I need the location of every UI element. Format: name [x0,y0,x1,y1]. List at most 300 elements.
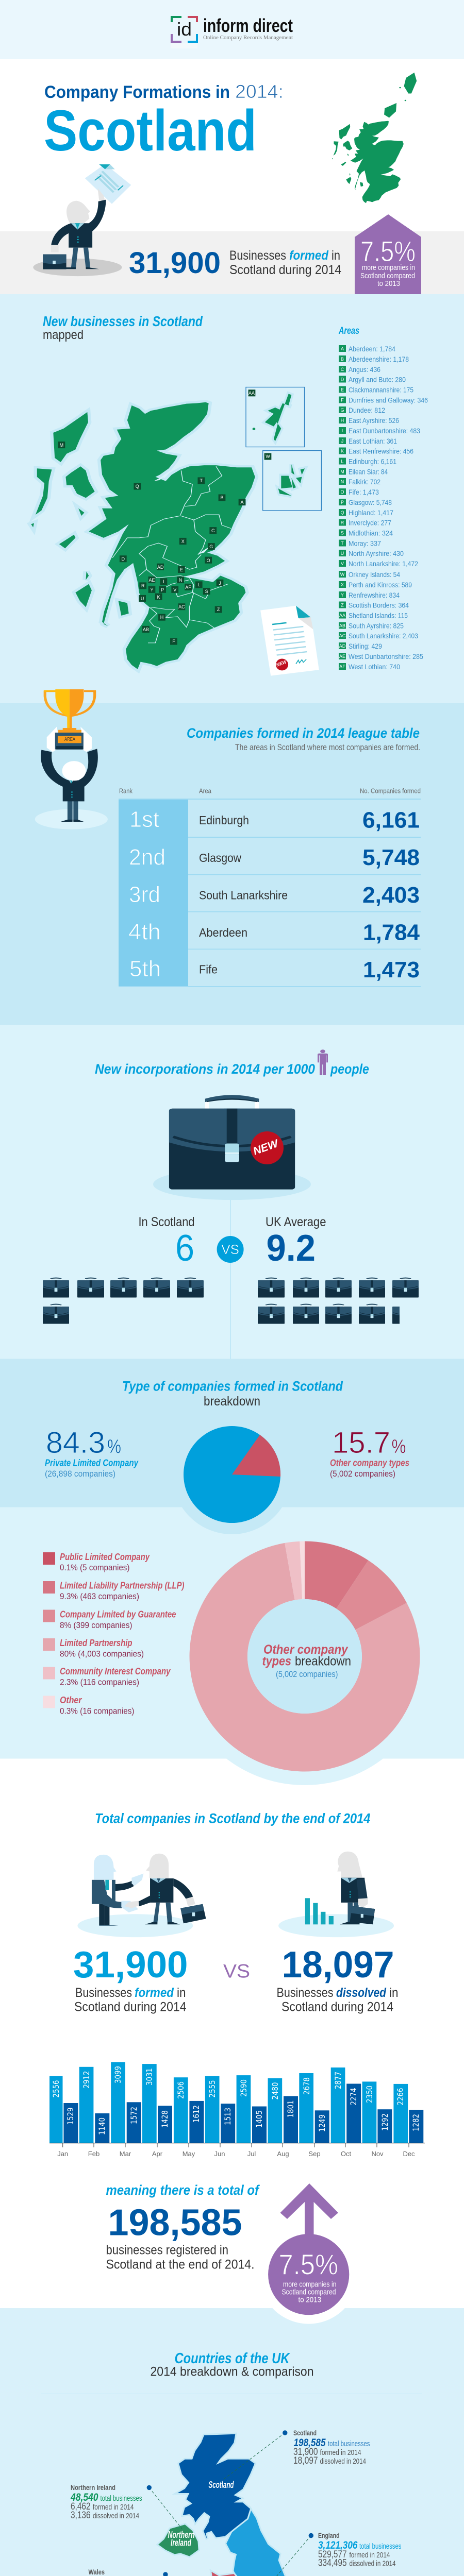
legend: areas: R [341,520,344,526]
map country labels [168,2480,276,2576]
callout: Northern Ireland figures: dissolved in 2014 [93,2512,139,2520]
callout: 7.5% growth arrow: 7.5% [278,2248,338,2280]
donut chart: other company types [176,1528,434,1785]
header band [0,0,464,59]
heading: Countries of the UK [174,2350,290,2367]
map: Scotland by area [31,402,255,669]
comparison: formed vs dissolved [73,1944,398,2014]
callout: Scotland figures: dissolved in 2014 [320,2457,366,2466]
legend: areas: Y [341,592,344,598]
legend: areas: East Lothian: 361 [349,437,397,445]
panel: companies formed league table [0,689,464,1025]
legend: areas: West Lothian: 740 [349,663,400,671]
inset: Shetland Islands: AA [248,391,255,396]
panel: other company types background [0,1507,464,1759]
map labels: C [211,528,215,533]
stat: 31,900 businesses formed: in [332,248,340,263]
callout: 7.5% house [355,214,421,294]
title block [44,81,284,163]
logo: inform direct: Online Company Records Management [203,35,293,41]
table: top areas formed: 2,403 [362,883,420,908]
legend: areas: West Dunbartonshire: 285 [349,652,423,660]
legend: areas: Argyll and Bute: 280 [349,375,406,383]
legend: areas: Shetland Islands: 115 [349,611,408,619]
callout: 7.5% house: 7.5% [360,235,416,267]
heading: Type of companies formed in Scotland [122,1379,343,1394]
map labels: A [240,500,244,505]
stat: 84.3% private limited: (26,898 companies) [45,1469,115,1479]
bar chart: monthly formed vs dissolved: 1529 [65,2107,75,2125]
legend: areas: East Ayrshire: 526 [349,416,399,425]
leader lines [149,2433,311,2576]
bar chart: monthly formed vs dissolved: Feb [88,2150,100,2158]
legend: areas: T [341,541,344,546]
bar chart: monthly formed vs dissolved: 2506 [176,2081,186,2099]
pie chart: company types [184,1426,280,1523]
bar chart: monthly formed vs dissolved: 1140 [97,2117,107,2135]
map labels: J [219,581,221,586]
legend: areas: East Dunbartonshire: 483 [349,427,420,435]
legend: areas: Dumfries and Galloway: 346 [349,396,428,404]
legend: other company types: 80% (4,003 companies) [60,1649,144,1659]
legend: areas: East Renfrewshire: 456 [349,447,413,455]
comparison: formed vs dissolved: in [389,1986,398,2000]
leader dots [147,2430,313,2576]
map country labels: Northern [168,2530,195,2540]
bar chart: monthly formed vs dissolved: 2555 [207,2080,217,2098]
icons: 9.2 briefcases UK average [258,1278,419,1324]
map country labels: Ireland [171,2538,192,2548]
map labels: L [197,582,200,587]
panel: type of companies [0,1359,464,1507]
panel: countries of the UK [0,2308,464,2576]
donut centre label: breakdown [295,1654,351,1668]
stat: 198,585 total: businesses registered in [106,2243,228,2258]
bar chart: monthly formed vs dissolved: 2912 [81,2071,91,2089]
stat: 15.7% other types: % [392,1436,406,1458]
callout: Scotland figures: Scotland [293,2429,317,2437]
donut centre label: (5,002 companies) [276,1669,338,1679]
callout: 7.5% growth arrow: to 2013 [298,2296,321,2304]
legend: areas: A [341,346,344,351]
trophy plaque text: AREA [64,737,75,742]
heading: New businesses in Scotland [43,313,203,329]
table: top areas formed: South Lanarkshire [199,888,288,902]
legend: areas: Areas [338,326,359,336]
table: top areas formed [119,787,421,987]
bar chart: monthly formed vs dissolved: 2480 [270,2082,280,2100]
map labels: D [122,556,125,562]
legend: areas: Clackmannanshire: 175 [349,385,413,394]
legend: areas: Perth and Kinross: 589 [349,581,412,589]
legend: areas: O [340,489,344,495]
illustration: businessman with document [33,164,131,276]
pie chart halo [172,1415,292,1534]
map labels: X [181,539,185,544]
donut centre label: Other company [263,1642,348,1657]
stat: 15.7% other types: Other company types [330,1458,409,1468]
inset: Orkney Islands: W [266,454,270,459]
stat: 31,900 businesses formed: 31,900 [129,246,221,280]
bar chart: monthly formed vs dissolved: 2274 [349,2088,358,2105]
callout: Scotland figures: 31,900 [293,2447,318,2458]
heading [43,313,203,342]
legend: other company types: Limited Partnership [60,1638,132,1648]
illustration: man holding trophy overhead [35,689,108,829]
legend: areas: U [341,551,344,556]
legend: other company types [43,1552,185,1716]
legend: areas: N [341,479,344,484]
legend: areas: P [341,500,344,505]
comparison: formed vs dissolved: Scotland during 2014 [281,2000,393,2014]
legend: areas: S [341,531,344,536]
stat: 31,900 businesses formed [129,246,341,280]
table: top areas formed: 3rd [129,882,160,907]
map region: Northern Ireland [158,2524,198,2556]
table: top areas formed: 4th [128,919,161,945]
map labels: M [60,443,63,448]
stats band [0,231,464,294]
map labels: U [141,596,144,601]
bar chart: monthly formed vs dissolved: 1249 [317,2114,327,2132]
legend: areas: Dundee: 812 [349,406,385,414]
legend: other company types: Company Limited by Guarantee [60,1609,176,1620]
figure: dissolving man and falling bars [305,1852,375,1924]
bar chart: monthly formed vs dissolved: 1513 [223,2108,233,2125]
bar chart: monthly formed vs dissolved: 1282 [411,2114,421,2131]
bar chart: monthly formed vs dissolved: 2678 [302,2077,311,2095]
icon: Scotland map small [332,73,417,203]
bar chart: monthly formed vs dissolved: 3031 [144,2068,154,2086]
legend: other company types: Public Limited Company [60,1552,150,1562]
bar chart: monthly formed vs dissolved: Aug [277,2150,289,2158]
map labels [60,443,244,644]
callout: England figures: total businesses [359,2542,401,2551]
stat: 198,585 total: Scotland at the end of 2014. [106,2258,255,2272]
table: top areas formed: 5,748 [362,845,420,870]
map labels: P [161,587,164,592]
callout: 7.5% house: more companies in [362,263,415,272]
logo: inform direct: id [177,19,192,40]
legend: areas: Angus: 436 [349,365,380,374]
table: top areas formed: Glasgow [199,851,241,865]
legend: areas: AB [339,623,345,629]
legend: areas: Highland: 1,417 [349,509,393,517]
legend: other company types: Limited Liability Partnership (LLP) [60,1581,185,1591]
stat: 15.7% other types [330,1426,409,1479]
stat: 198,585 total: 198,585 [108,2202,242,2243]
legend: other company types: 8% (399 companies) [60,1620,132,1630]
callout: Scotland figures: 18,097 [293,2455,318,2466]
bar chart: monthly formed vs dissolved: Nov [371,2150,384,2158]
map labels: AD [157,565,164,570]
comparison: formed vs dissolved: dissolved [336,1986,387,2000]
title: Scotland: Scotland [44,98,257,163]
legend: areas: Falkirk: 702 [349,478,380,486]
comparison: Scotland 6 vs UK 9.2 [138,1215,326,1269]
legend: other company types: Other [60,1695,82,1705]
callout: England figures: 3,121,306 [318,2539,358,2551]
map labels: T [200,478,203,483]
legend: areas: South Lanarkshire: 2,403 [349,632,418,640]
comparison: Scotland 6 vs UK 9.2: VS [221,1242,239,1257]
bar chart: monthly formed vs dissolved: Jul [247,2150,256,2158]
callout: England figures: dissolved in 2014 [350,2560,396,2568]
map labels: Y [150,587,154,592]
stat: 84.3% private limited: % [107,1436,121,1458]
legend: areas: Aberdeenshire: 1,178 [349,355,409,363]
legend: areas: G [340,408,344,413]
donut centre label: types [262,1654,291,1668]
bar chart: monthly formed vs dissolved: 2590 [239,2079,248,2097]
legend: areas: North Lanarkshire: 1,472 [349,560,418,568]
legend: areas: J [341,438,343,444]
heading [41,2350,422,2394]
map labels: Q [136,484,139,489]
icons: 6 briefcases in Scotland [43,1278,204,1324]
title line: Company Formations in [44,82,230,102]
legend: areas: F [341,398,344,403]
legend: areas: Scottish Borders: 364 [349,601,409,609]
bar chart: monthly formed vs dissolved: 1801 [286,2100,295,2117]
legend: areas: H [341,418,344,423]
table: top areas formed: Edinburgh [199,814,249,827]
legend: areas: B [341,357,344,362]
bar chart: monthly formed vs dissolved: 1292 [380,2113,390,2131]
map labels: N [179,578,182,583]
legend: areas: W [340,572,345,577]
table: top areas formed: Aberdeen [199,926,247,939]
callout: Scotland figures: total businesses [328,2439,370,2448]
stat: 31,900 businesses formed: Businesses [229,248,286,263]
map labels: AE [148,578,155,583]
inset: Shetland Islands [246,387,304,447]
panel: new incorporations per 1000 people [0,1025,464,1359]
map labels: O [207,558,210,563]
table: top areas formed: Fife [199,962,218,976]
bar chart: monthly formed vs dissolved: 3099 [113,2066,123,2083]
legend: areas: Renfrewshire: 834 [349,591,400,599]
map labels: G [209,544,213,549]
callout: 7.5% house: Scotland compared [360,272,415,280]
heading [95,1049,369,1077]
legend: areas: L [341,459,344,464]
comparison: Scotland 6 vs UK 9.2: In Scotland [138,1215,195,1229]
shadow and briefcase with NEW badge: NEW [252,1137,281,1158]
comparison: formed vs dissolved: 31,900 [73,1944,188,1986]
bar chart: monthly formed vs dissolved: 2877 [333,2072,343,2089]
heading [122,1379,343,1409]
callout: England figures: formed in 2014 [350,2551,390,2560]
legend: areas: AE [339,654,345,659]
legend: other company types: 0.1% (5 companies) [60,1563,130,1572]
legend: areas: Eilean Siar: 84 [349,468,388,476]
map labels: V [173,587,176,592]
legend: areas: V [341,561,344,566]
callout: England figures: 334,495 [318,2557,346,2569]
bar chart: monthly formed vs dissolved: 2350 [364,2086,374,2103]
stat: 31,900 businesses formed: formed [289,248,329,263]
logo: inform direct [171,15,293,48]
legend: areas: K [341,448,344,453]
stat: 84.3% private limited: Private Limited Company [45,1458,139,1468]
heading: people [330,1061,369,1077]
bar chart: monthly formed vs dissolved: Dec [403,2150,415,2158]
callout: England figures [318,2531,401,2569]
map region: England [195,2509,308,2576]
bar chart: monthly formed vs dissolved: Jun [214,2150,225,2158]
legend: areas: AF [339,664,345,669]
callout: Northern Ireland figures: formed in 2014 [93,2503,134,2512]
callout: England figures: England [318,2531,339,2539]
table: top areas formed: Rank [119,787,132,794]
callout: 7.5% growth arrow: Scotland compared [281,2287,336,2297]
comparison: formed vs dissolved: formed [135,1986,174,2000]
legend: areas: E [341,387,344,393]
table: top areas formed: 1st [129,807,159,832]
comparison: formed vs dissolved: in [177,1986,186,2000]
bar chart: monthly formed vs dissolved: Apr [152,2150,163,2158]
stat: 31,900 businesses formed: Scotland during 2014 [229,263,341,277]
callout: Northern Ireland figures: 48,540 [70,2492,98,2503]
stat: 15.7% other types: (5,002 companies) [330,1469,395,1479]
map labels: I [163,579,164,584]
callout: Northern Ireland figures: total businesses [100,2494,142,2503]
legend: areas: AA [339,613,345,618]
bar chart: monthly formed vs dissolved: Jan [57,2150,68,2158]
shadow and briefcase with NEW badge [153,1095,311,1200]
map labels: AF [185,585,191,590]
callout: 7.5% growth arrow [259,2183,358,2324]
legend: other company types: 0.3% (16 companies) [60,1706,134,1716]
bar chart: monthly formed vs dissolved: 1428 [160,2110,170,2128]
table: top areas formed: 1,473 [363,957,420,982]
heading [187,725,420,752]
heading: breakdown [204,1394,260,1409]
legend: areas: C [341,367,344,372]
icon: trophy [44,689,96,750]
comparison: Scotland 6 vs UK 9.2: 9.2 [266,1228,316,1269]
callout: Scotland figures: 198,585 [294,2437,326,2449]
comparison: formed vs dissolved: VS [223,1961,250,1981]
map labels: AC [178,604,185,609]
map labels: R [141,583,145,588]
bar chart: monthly formed vs dissolved: 2266 [395,2088,405,2105]
stat: 198,585 total [106,2182,260,2272]
map labels: S [205,589,208,594]
callout: England figures: 529,577 [318,2549,346,2560]
map region: Wales [201,2572,241,2576]
legend: areas: Glasgow: 5,748 [349,498,392,506]
stat: 84.3% private limited [45,1426,139,1479]
bar chart: monthly formed vs dissolved: Oct [341,2150,351,2158]
map region: Scotland [177,2434,255,2539]
illustration: handshake and dissolving business [77,1852,394,1937]
callout: Northern Ireland figures: Northern Ireland [71,2483,115,2492]
legend: areas: I [342,428,343,433]
legend: areas: Z [341,603,344,608]
callout: Northern Ireland figures: 6,462 [71,2501,91,2512]
title line: 2014: [235,81,284,102]
legend: areas: X [341,582,344,587]
callout: Northern Ireland figures [70,2483,142,2521]
bar chart: monthly formed vs dissolved: Mar [120,2150,131,2158]
comparison: formed vs dissolved: Businesses [276,1986,333,2000]
heading: mapped [43,328,84,342]
comparison: Scotland 6 vs UK 9.2: UK Average [266,1215,326,1229]
legend: areas: AC [339,633,346,638]
donut centre label [262,1642,351,1679]
legend: areas: Orkney Islands: 54 [349,570,400,579]
table: top areas formed: 2nd [129,845,165,870]
map labels: K [157,595,160,600]
legend: areas: Fife: 1,473 [349,488,379,496]
table: top areas formed: No. Companies formed [360,787,421,794]
map labels: B [220,495,224,500]
map labels: H [160,615,163,620]
legend: areas: Moray: 337 [349,539,381,547]
heading: 2014 breakdown & comparison [151,2365,313,2379]
icon: document with NEW stamp [260,606,319,676]
legend: areas: North Ayrshire: 430 [349,549,404,557]
legend: other company types: Community Interest Company [60,1666,171,1676]
callout: Scotland figures [293,2429,370,2466]
legend: areas: AD [339,643,346,649]
inset: Orkney Islands [263,451,321,511]
callout: 7.5% house: to 2013 [377,279,400,288]
bar chart: monthly formed vs dissolved [49,2062,425,2158]
table: top areas formed: 6,161 [362,808,420,833]
legend: areas: M [340,469,344,474]
legend: areas: D [341,377,344,382]
callout: Northern Ireland figures: 3,136 [71,2510,91,2521]
comparison: formed vs dissolved: Scotland during 2014 [74,2000,187,2014]
bar chart: monthly formed vs dissolved: May [183,2150,195,2158]
figure: right man [124,1854,206,1924]
bar chart: monthly formed vs dissolved: 1612 [191,2105,201,2123]
legend: other company types: 9.3% (463 companies) [60,1591,139,1601]
comparison: formed vs dissolved: 18,097 [281,1944,394,1986]
figure: left man [92,1855,143,1926]
map labels: AB [143,627,149,632]
heading: total companies: Total companies in Scotland by the end of 2014 [95,1810,370,1826]
map labels: Z [217,607,220,612]
heading: New incorporations in 2014 per 1000 [95,1061,315,1077]
callout: Wales figures: Wales [89,2568,105,2576]
bar chart: monthly formed vs dissolved: Sep [308,2150,321,2158]
heading: The areas in Scotland where most companies are formed. [235,742,420,752]
legend: areas: Stirling: 429 [349,642,382,650]
bar chart: monthly formed vs dissolved: 2556 [51,2080,61,2098]
callout: 7.5% growth arrow: more companies in [283,2280,336,2289]
legend: areas: Edinburgh: 6,161 [349,457,396,466]
map labels: F [172,639,175,644]
NEW stamp text: NEW [275,659,288,668]
map: UK countries [158,2434,308,2576]
table: top areas formed: Area [199,787,212,794]
stat: 15.7% other types: 15.7 [332,1426,390,1460]
legend: other company types: 2.3% (116 companies) [60,1677,139,1687]
map country labels: Scotland [208,2480,234,2490]
logo: inform direct: inform direct [203,15,293,36]
stat: 84.3% private limited: 84.3 [46,1426,105,1460]
heading: Companies formed in 2014 league table [187,725,420,741]
table: top areas formed: 1,784 [363,920,420,945]
legend: areas: Midlothian: 324 [349,529,393,537]
map labels: E [180,567,183,572]
comparison: formed vs dissolved: Businesses [75,1986,132,2000]
panel: new businesses mapped [0,294,464,703]
